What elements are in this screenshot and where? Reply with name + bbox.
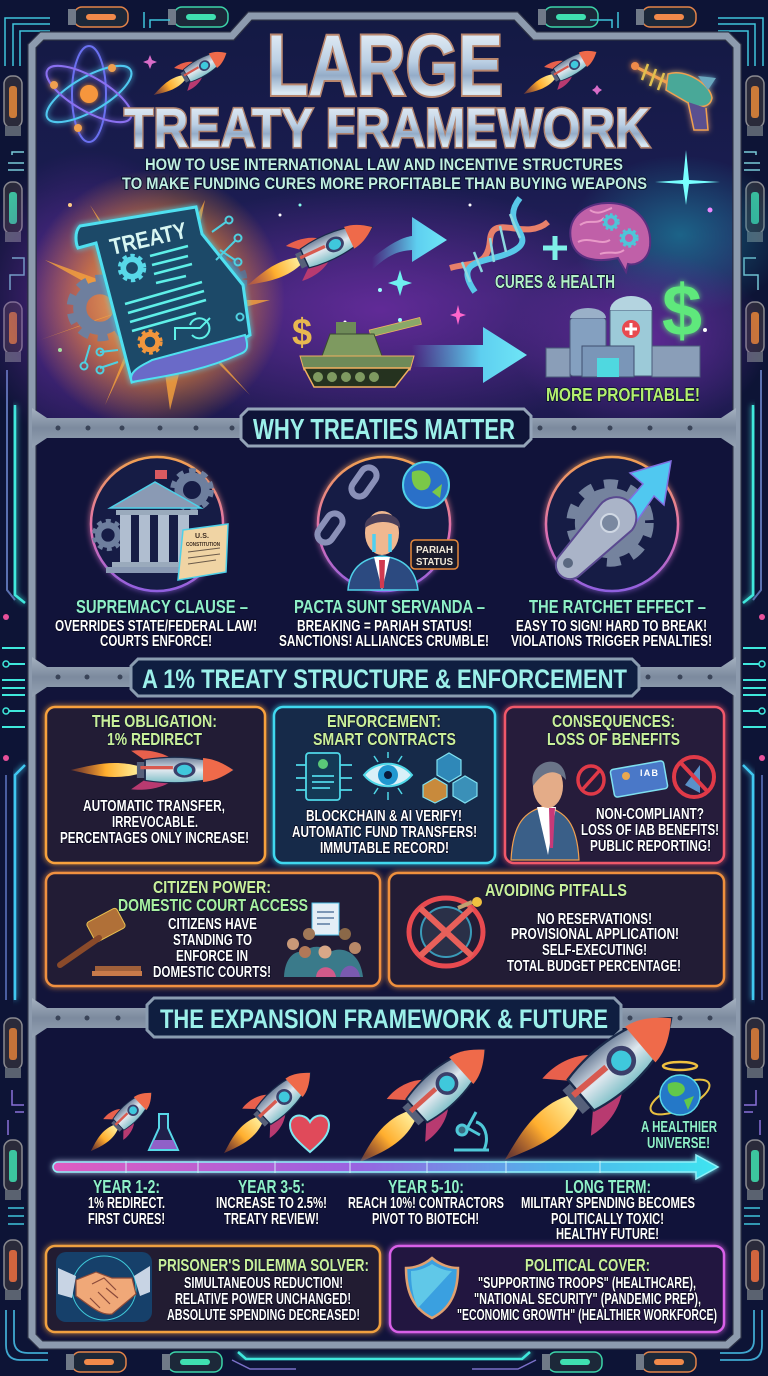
- label: healthier universe: UNIVERSE!: [647, 1135, 710, 1152]
- text: pacta sunt servanda: BREAKING = PARIAH STATUS!: [297, 618, 472, 635]
- rocket: year 3-5: [210, 1058, 324, 1168]
- panel: treaty structure: [35, 688, 733, 1008]
- text: pacta sunt servanda: SANCTIONS! ALLIANCES CRUMBLE!: [279, 633, 489, 650]
- text: year 1-2: [88, 1177, 165, 1228]
- icon: ban sign: [578, 766, 604, 794]
- icon: ray gun: [631, 62, 716, 130]
- card: citizen power: DOMESTIC COURT ACCESS: [118, 895, 308, 915]
- icon: eye: [364, 752, 412, 800]
- icon: gavel: [60, 907, 142, 976]
- icon: microscope: [454, 1112, 489, 1150]
- card: the obligation: PERCENTAGES ONLY INCREASE!: [60, 830, 249, 847]
- card: avoiding pitfalls: AVOIDING PITFALLS: [485, 880, 627, 900]
- text: year 3-5: INCREASE TO 2.5%!: [216, 1195, 327, 1212]
- icon: rocket horizontal: [71, 750, 233, 790]
- text: supremacy clause: [55, 597, 257, 650]
- icon: ratchet effect: [546, 457, 678, 591]
- sparkle dots: [143, 55, 602, 95]
- hero nebula: [0, 150, 768, 450]
- rocket: year 5-10: [340, 1028, 504, 1184]
- icon: circuit nodes around scroll: [80, 216, 244, 374]
- card: avoiding pitfalls: NO RESERVATIONS!: [537, 911, 652, 928]
- icon: supremacy clause: U.S.: [195, 533, 209, 540]
- text: long term: [521, 1177, 695, 1243]
- icon: heart: [290, 1116, 329, 1152]
- section bar: why treaties matter: [32, 408, 736, 448]
- text: long term: HEALTHY FUTURE!: [556, 1226, 659, 1243]
- icon: tank: [300, 318, 421, 387]
- card: enforcement: [274, 707, 495, 863]
- card: the obligation: IRREVOCABLE.: [112, 814, 198, 831]
- card: political cover: POLITICAL COVER:: [525, 1255, 650, 1275]
- card: consequences: CONSEQUENCES:: [552, 711, 675, 731]
- icon: shield: [406, 1258, 458, 1318]
- card: consequences: [505, 707, 724, 863]
- icon: plus: [543, 236, 567, 260]
- icon: brain with gears: [570, 203, 650, 272]
- title: TREATY FRAMEWORK: [124, 96, 650, 159]
- text: ratchet effect: THE RATCHET EFFECT –: [529, 597, 706, 617]
- icon: official: [511, 762, 579, 860]
- starburst behind treaty: [25, 170, 285, 430]
- title: [124, 18, 650, 159]
- card: prisoner's dilemma solver: PRISONER'S DILEMMA SOLVER:: [158, 1255, 369, 1275]
- label: cures and health: CURES & HEALTH: [495, 272, 615, 292]
- card: consequences: LOSS OF BENEFITS: [547, 729, 680, 749]
- text: year 1-2: YEAR 1-2:: [93, 1177, 160, 1197]
- card: enforcement: SMART CONTRACTS: [313, 729, 456, 749]
- card: prisoner's dilemma solver: SIMULTANEOUS REDUCTION!: [184, 1275, 343, 1292]
- icon: supremacy clause: [91, 457, 228, 591]
- section bar: expansion framework: [32, 998, 736, 1038]
- icon: healthier universe earth: [646, 1062, 714, 1121]
- icon: IAB card: IAB: [640, 768, 658, 778]
- section bar: expansion framework: THE EXPANSION FRAMEWORK & FUTURE: [160, 1004, 608, 1034]
- card: citizen power: CITIZENS HAVE: [168, 916, 257, 933]
- text: year 3-5: TREATY REVIEW!: [224, 1211, 319, 1228]
- card: citizen power: STANDING TO: [173, 932, 252, 949]
- card: citizen power: ENFORCE IN: [176, 948, 248, 965]
- icon: crossed bomb: [409, 897, 483, 966]
- text: year 3-5: YEAR 3-5:: [238, 1177, 305, 1197]
- card: political cover: [390, 1246, 724, 1332]
- text: long term: LONG TERM:: [565, 1177, 651, 1197]
- icon: small rocket right: [517, 40, 603, 106]
- card: consequences: LOSS OF IAB BENEFITS!: [581, 822, 719, 839]
- text: supremacy clause: OVERRIDES STATE/FEDERAL LAW!: [55, 618, 257, 635]
- icon: atom: [39, 46, 139, 142]
- card: prisoner's dilemma solver: [46, 1246, 380, 1332]
- card: the obligation: AUTOMATIC TRANSFER,: [83, 798, 225, 815]
- arrow: tank to hospital: [412, 327, 527, 383]
- text: year 3-5: [216, 1177, 327, 1228]
- icon: pacta sunt servanda: PARIAH: [416, 544, 453, 556]
- card: avoiding pitfalls: SELF-EXECUTING!: [542, 942, 647, 959]
- icon: handshake: [56, 1252, 152, 1322]
- card: enforcement: IMMUTABLE RECORD!: [320, 840, 449, 857]
- icon: treaty scroll: [76, 207, 250, 382]
- arrow: rocket to cures: [372, 217, 447, 270]
- icon: gears behind treaty: [71, 258, 244, 337]
- text: year 1-2: 1% REDIRECT.: [88, 1195, 165, 1212]
- icon: supremacy clause: CONSTITUTION: [186, 542, 220, 548]
- rocket: year 1-2: [80, 1082, 162, 1162]
- subtitle: TO MAKE FUNDING CURES MORE PROFITABLE THAN BUYING WEAPONS: [122, 175, 647, 193]
- text: supremacy clause: SUPREMACY CLAUSE –: [76, 597, 248, 617]
- icon: blockchain cubes: [423, 753, 477, 803]
- card: citizen power: [46, 873, 380, 986]
- text: supremacy clause: COURTS ENFORCE!: [100, 633, 212, 650]
- icon: dollar green: $: [662, 271, 702, 351]
- panel: why treaties matter: [35, 438, 733, 670]
- card: avoiding pitfalls: PROVISIONAL APPLICATION!: [511, 926, 679, 943]
- icon: hero rocket: [239, 209, 381, 303]
- card: avoiding pitfalls: TOTAL BUDGET PERCENTAGE!: [507, 958, 681, 975]
- text: year 5-10: PIVOT TO BIOTECH!: [372, 1211, 479, 1228]
- panel: hero: [0, 20, 768, 450]
- subtitle: HOW TO USE INTERNATIONAL LAW AND INCENTIVE STRUCTURES: [145, 156, 623, 174]
- icon: hospital: [537, 296, 708, 378]
- text: long term: POLITICALLY TOXIC!: [551, 1211, 664, 1228]
- title: LARGE: [267, 18, 503, 114]
- section bar: why treaties matter: WHY TREATIES MATTER: [253, 414, 515, 446]
- card: avoiding pitfalls: [389, 873, 724, 986]
- subtitle: [122, 156, 647, 193]
- card: consequences: PUBLIC REPORTING!: [590, 838, 711, 855]
- text: pacta sunt servanda: [279, 597, 489, 650]
- card: enforcement: ENFORCEMENT:: [327, 711, 441, 731]
- text: year 5-10: [348, 1177, 504, 1228]
- header plate: [131, 659, 639, 696]
- icon: small rocket left: [147, 41, 233, 107]
- text: year 5-10: YEAR 5-10:: [388, 1177, 464, 1197]
- text: ratchet effect: EASY TO SIGN! HARD TO BREAK!: [516, 618, 707, 635]
- icon: flask: [149, 1114, 178, 1150]
- label: healthier universe: A HEALTHIER: [641, 1119, 717, 1136]
- card: citizen power: CITIZEN POWER:: [153, 877, 271, 897]
- icon: dna helix: [450, 198, 548, 292]
- text: pacta sunt servanda: PACTA SUNT SERVANDA –: [294, 597, 485, 617]
- text: year 1-2: FIRST CURES!: [88, 1211, 165, 1228]
- card: prisoner's dilemma solver: RELATIVE POWER UNCHANGED!: [175, 1291, 351, 1308]
- icon: pacta sunt servanda: STATUS: [416, 556, 453, 568]
- text: long term: MILITARY SPENDING BECOMES: [521, 1195, 695, 1212]
- card: the obligation: THE OBLIGATION:: [92, 711, 217, 731]
- icon: IAB card: [610, 761, 668, 797]
- rocket: long term: [480, 989, 696, 1189]
- card: citizen power: DOMESTIC COURTS!: [153, 964, 271, 981]
- section bar: treaty structure: [32, 657, 736, 697]
- text: ratchet effect: VIOLATIONS TRIGGER PENALTIES!: [511, 633, 712, 650]
- icon: treaty scroll: TREATY: [107, 217, 189, 260]
- header plate: [147, 998, 621, 1037]
- header plate: [241, 409, 531, 446]
- text: ratchet effect: [511, 597, 712, 650]
- panel: expansion framework: [35, 1028, 733, 1340]
- label: more profitable: MORE PROFITABLE!: [546, 385, 700, 405]
- section bar: treaty structure: A 1% TREATY STRUCTURE & ENFORCEMENT: [142, 664, 627, 694]
- icon: citizens with document: [284, 903, 363, 977]
- timeline arrow: [53, 1155, 718, 1179]
- icon: pacta sunt servanda: [314, 457, 458, 591]
- icon: dollar gold: $: [292, 312, 312, 354]
- card: the obligation: 1% REDIRECT: [107, 729, 202, 749]
- card: prisoner's dilemma solver: ABSOLUTE SPENDING DECREASED!: [167, 1307, 360, 1324]
- icon: ban megaphone: [674, 757, 714, 797]
- icon: smart contract: [296, 753, 352, 800]
- text: year 5-10: REACH 10%! CONTRACTORS: [348, 1195, 504, 1212]
- label: healthier universe: [641, 1119, 717, 1152]
- card: enforcement: AUTOMATIC FUND TRANSFERS!: [292, 824, 477, 841]
- card: the obligation: [46, 707, 265, 863]
- card: consequences: NON-COMPLIANT?: [596, 806, 704, 823]
- card: enforcement: BLOCKCHAIN & AI VERIFY!: [306, 808, 462, 825]
